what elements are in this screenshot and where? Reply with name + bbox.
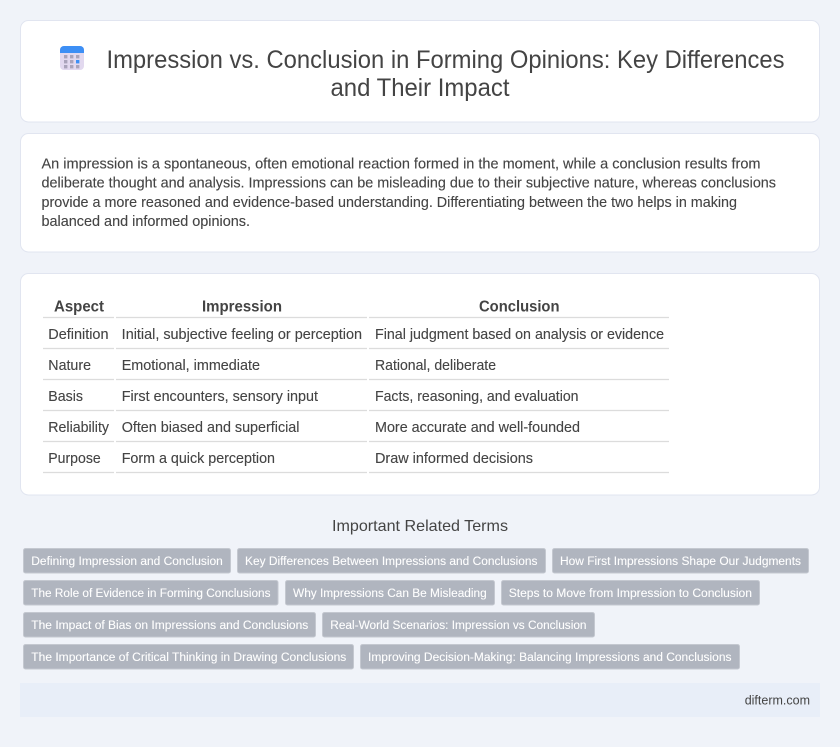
icon: calendar — [60, 46, 84, 70]
table row: Definition: Final judgment based on analysis or evidence — [375, 327, 664, 343]
text block: intro paragraph: deliberate thought and analysis. Impressions can be misleading due to their subjective nature, whereas conclusions — [42, 176, 776, 192]
table row: Nature: Rational, deliberate — [375, 358, 496, 374]
tag: Improving Decision-Making: Balancing Impressions and Conclusions — [368, 650, 732, 664]
table row: Purpose: Form a quick perception — [122, 451, 275, 467]
tag — [322, 612, 594, 637]
tag: Defining Impression and Conclusion — [31, 554, 223, 568]
table row: Purpose: Purpose — [48, 451, 101, 467]
table row: Definition — [48, 327, 664, 343]
panel: comparison table — [20, 274, 820, 495]
table row: Definition: Initial, subjective feeling or perception — [122, 327, 362, 343]
table header: Impression — [202, 299, 282, 316]
table header: Conclusion — [479, 299, 560, 316]
table row: Reliability: Reliability — [48, 420, 110, 436]
tag: How First Impressions Shape Our Judgments — [560, 554, 801, 568]
title: and Their Impact — [330, 75, 510, 102]
tag: Why Impressions Can Be Misleading — [293, 586, 487, 600]
table row: Nature: Emotional, immediate — [122, 358, 260, 374]
tag — [552, 548, 808, 573]
tag cloud: related terms — [24, 548, 808, 669]
table row: Purpose — [48, 451, 533, 467]
footer — [20, 683, 820, 717]
title — [106, 47, 784, 102]
tag — [24, 548, 230, 573]
tag: Key Differences Between Impressions and Conclusions — [245, 554, 538, 568]
table header — [54, 299, 560, 316]
table row: Definition: Definition — [48, 327, 108, 343]
tag: The Role of Evidence in Forming Conclusions — [31, 586, 270, 600]
tag — [24, 612, 316, 637]
table row: Reliability — [48, 420, 580, 436]
tag — [238, 548, 546, 573]
tag — [24, 644, 354, 669]
text block: intro paragraph: provide a more reasoned and evidence-based understanding. Differentiating between the two helps in making — [42, 195, 737, 211]
tag: The Impact of Bias on Impressions and Conclusions — [31, 618, 308, 632]
heading: related terms: Important Related Terms — [332, 518, 508, 535]
table row: Reliability: More accurate and well-founded — [375, 420, 580, 436]
tag — [286, 580, 494, 605]
table row: Nature: Nature — [48, 358, 91, 374]
footer brand: difterm.com — [745, 692, 810, 708]
tag: Real-World Scenarios: Impression vs Conclusion — [330, 618, 587, 632]
tag — [502, 580, 760, 605]
table row: Basis: Facts, reasoning, and evaluation — [375, 389, 578, 405]
tag — [24, 580, 278, 605]
tag — [360, 644, 740, 669]
table row: Basis: First encounters, sensory input — [122, 389, 318, 405]
table row: Reliability: Often biased and superficial — [122, 420, 300, 436]
table row: Basis — [48, 389, 579, 405]
title: Impression vs. Conclusion in Forming Opinions: Key Differences — [106, 47, 784, 74]
table header: Aspect — [54, 299, 105, 316]
tag: The Importance of Critical Thinking in Drawing Conclusions — [31, 650, 346, 664]
tag: Steps to Move from Impression to Conclusion — [509, 586, 752, 600]
panel: header — [20, 20, 820, 122]
table row: Nature — [48, 358, 496, 374]
panel: intro text — [20, 134, 820, 252]
text block: intro paragraph: balanced and informed opinions. — [42, 214, 250, 230]
text block: intro paragraph: An impression is a spontaneous, often emotional reaction formed in the moment, while a conclusion results from — [42, 156, 761, 172]
table row: Basis: Basis — [48, 389, 83, 405]
text block: intro paragraph — [42, 156, 776, 230]
table row: Purpose: Draw informed decisions — [375, 451, 533, 467]
